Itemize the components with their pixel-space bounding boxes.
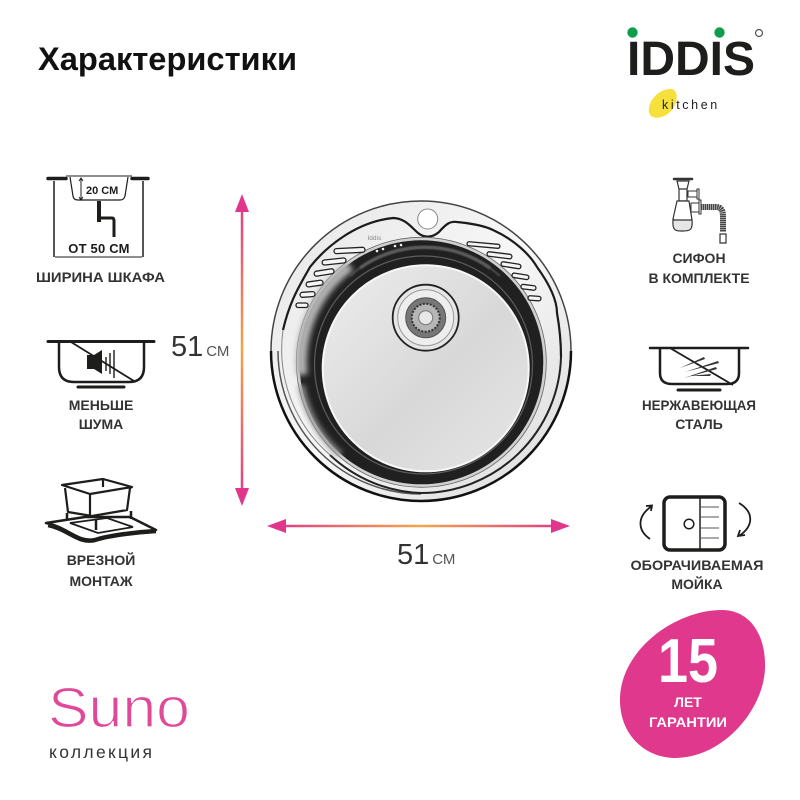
icon: cabinet width: 20 СМ xyxy=(86,185,118,197)
left drainboard slots xyxy=(296,247,365,308)
label: less noise: ШУМА xyxy=(79,416,123,432)
collection name: Suno xyxy=(48,676,190,740)
warranty badge xyxy=(620,610,765,758)
vertical dimension arrow xyxy=(235,194,249,506)
logo: IDDIS kitchen: IDDIS xyxy=(627,33,755,86)
label: stainless steel: СТАЛЬ xyxy=(675,416,723,432)
drain xyxy=(393,285,459,351)
label: height: 51СМ xyxy=(171,331,229,363)
sink photo: Iddis xyxy=(368,235,382,242)
icon: flush mount xyxy=(46,479,156,542)
label: reversible bowl: МОЙКА xyxy=(671,575,723,592)
icon: cabinet width xyxy=(48,176,148,257)
icon: reversible bowl xyxy=(640,497,750,550)
horizontal dimension arrow xyxy=(267,519,570,533)
logo: IDDIS kitchen xyxy=(627,27,762,118)
bowl xyxy=(296,237,546,487)
label: flush mount: ВРЕЗНОЙ xyxy=(67,551,135,568)
collection caption: коллекция xyxy=(49,742,152,762)
warranty badge: 15 xyxy=(658,627,718,696)
icon: stainless steel xyxy=(650,348,748,390)
title: Характеристики xyxy=(38,41,297,77)
label: siphon: СИФОН xyxy=(672,250,726,266)
label: flush mount: МОНТАЖ xyxy=(69,573,133,589)
label: width: 51СМ xyxy=(397,539,455,571)
warranty badge: ГАРАНТИИ xyxy=(649,714,727,730)
label: stainless steel: НЕРЖАВЕЮЩАЯ xyxy=(642,397,756,413)
warranty badge: ЛЕТ xyxy=(674,694,702,710)
icon: less noise xyxy=(48,342,154,387)
label: less noise: МЕНЬШЕ xyxy=(69,397,133,413)
icon: cabinet width: ОТ 50 СМ xyxy=(68,241,130,256)
sink photo xyxy=(271,201,571,501)
logo: IDDIS kitchen: kitchen xyxy=(662,98,720,112)
label: cabinet width: ШИРИНА ШКАФА xyxy=(36,269,165,285)
label: siphon: В КОМПЛЕКТЕ xyxy=(648,270,750,286)
right drainboard slots xyxy=(467,242,541,301)
label: reversible bowl: ОБОРАЧИВАЕМАЯ xyxy=(630,557,764,573)
deck ridge with notch xyxy=(283,218,561,357)
tap hole xyxy=(418,209,438,229)
overflow holes xyxy=(376,244,402,252)
icon: siphon xyxy=(673,179,726,243)
